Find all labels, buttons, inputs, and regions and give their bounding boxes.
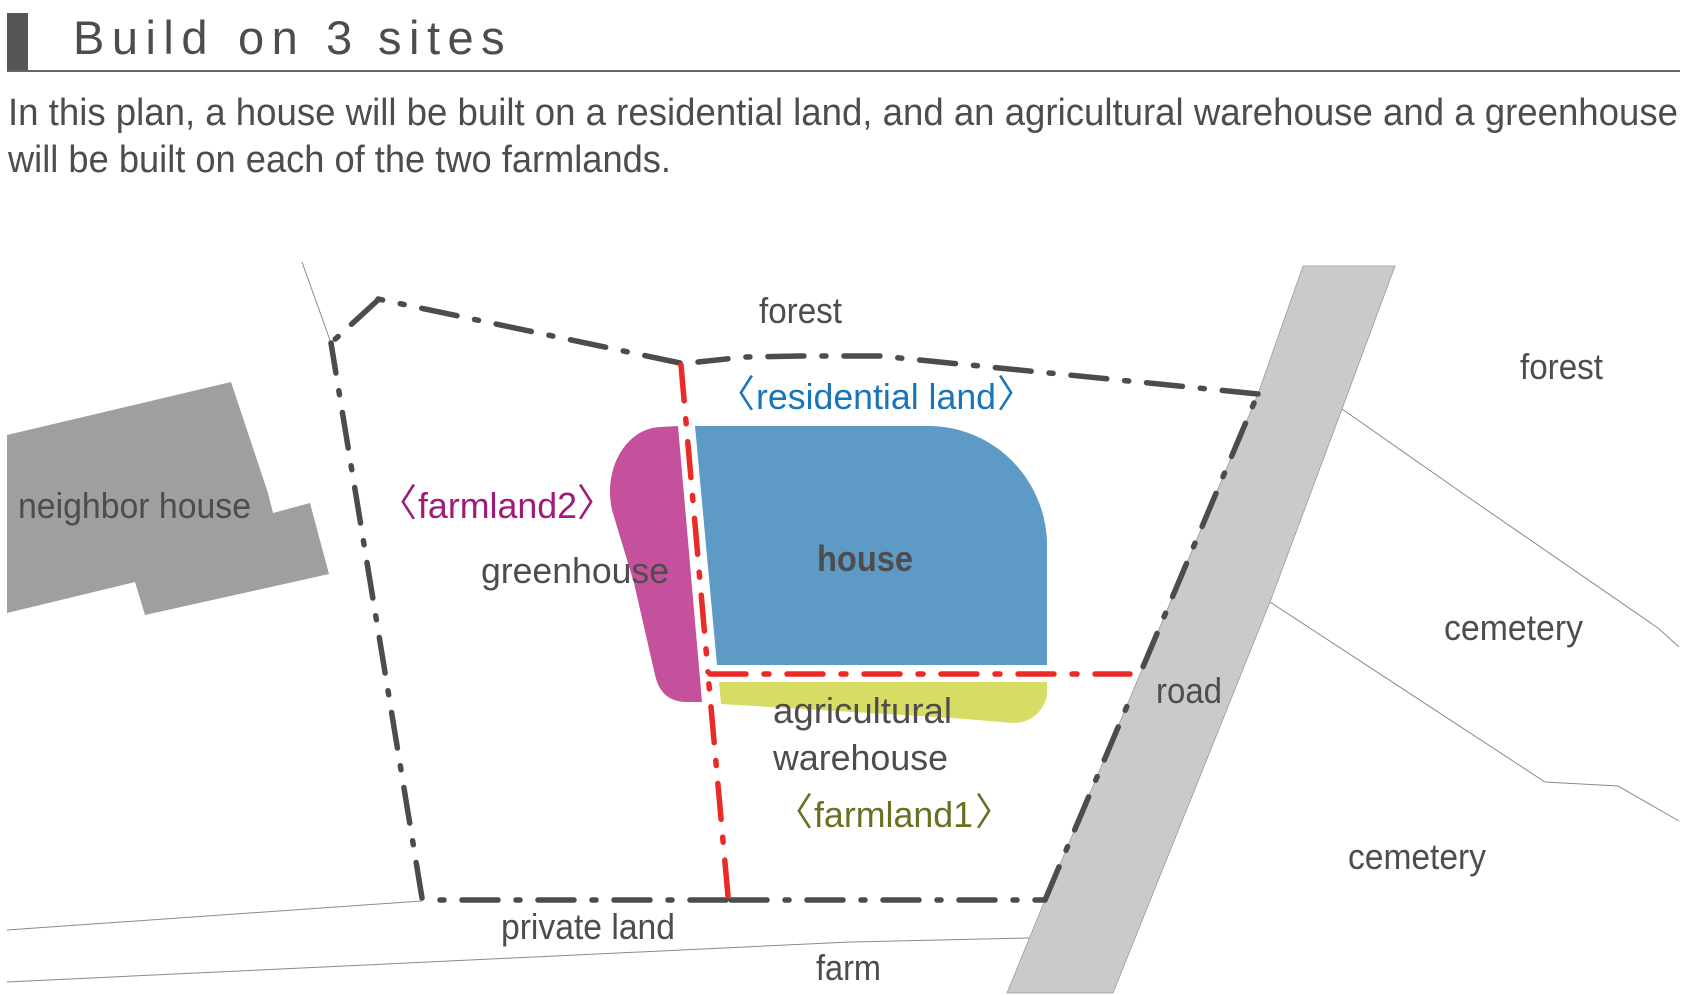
house area on residential land	[695, 426, 1047, 665]
text block: plan description: will be built on each of the two farmlands.	[7, 139, 671, 181]
label: agricultural warehouse	[772, 690, 952, 778]
road	[1007, 266, 1395, 993]
agricultural warehouse area on farmland 1	[719, 682, 1047, 723]
label: residential land	[717, 363, 1035, 418]
heading: Build on 3 sites	[7, 11, 1680, 72]
greenhouse area on farmland 2	[610, 426, 702, 702]
label: farmland1	[775, 781, 1013, 836]
label: road: road	[1156, 670, 1222, 711]
label: residential land: 〉	[997, 363, 1035, 418]
site boundary: grey dash-dot line	[331, 299, 1258, 900]
label: agricultural warehouse: warehouse	[772, 737, 948, 778]
heading: Build on 3 sites: sites	[378, 11, 512, 64]
label: farmland2: 〉	[577, 472, 615, 527]
label: private land: private land	[501, 906, 675, 947]
heading: Build on 3 sites: on	[238, 11, 326, 64]
label: farmland2: farmland2	[418, 485, 577, 526]
label: house: house	[817, 538, 913, 579]
label: farmland1: farmland1	[814, 794, 973, 835]
label: neighbor house: neighbor house	[18, 485, 251, 526]
label: greenhouse: greenhouse	[481, 550, 669, 591]
label: residential land: 〈	[717, 363, 755, 418]
label: forest east: forest	[1520, 346, 1603, 387]
surrounding boundary lines	[7, 262, 1679, 982]
label: cemetery lower: cemetery	[1348, 836, 1486, 877]
label: farmland1: 〈	[775, 781, 813, 836]
label: farmland1: 〉	[975, 781, 1013, 836]
label: farmland2	[379, 472, 615, 527]
text block: plan description	[7, 92, 1678, 181]
neighbor house footprint	[7, 382, 329, 615]
label: residential land: residential land	[756, 376, 996, 417]
parcel division: red dash-dot lines	[681, 365, 1130, 896]
label: forest north: forest	[759, 290, 842, 331]
heading: Build on 3 sites: 3	[326, 11, 380, 64]
text block: plan description: In this plan, a house will be built on a residential land, and an agricultural warehouse and a greenhouse	[8, 92, 1678, 134]
label: farmland2: 〈	[379, 472, 417, 527]
label: cemetery upper: cemetery	[1444, 607, 1583, 648]
heading: Build on 3 sites: Build	[73, 11, 236, 64]
label: agricultural warehouse: agricultural	[773, 690, 952, 731]
label: farm: farm	[816, 947, 881, 988]
